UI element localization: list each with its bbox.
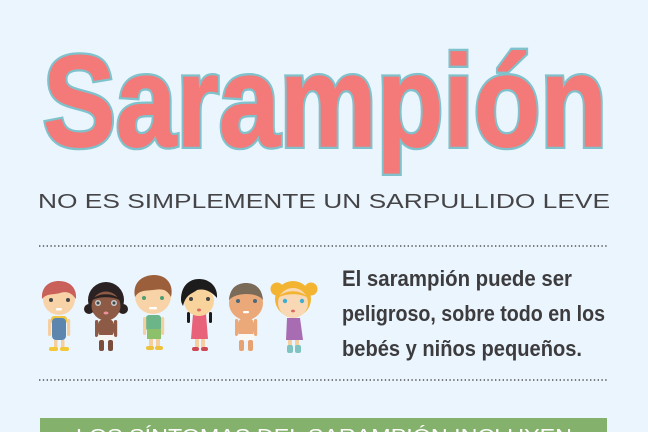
children illustration	[42, 275, 317, 353]
body text: El sarampión puede ser	[342, 266, 572, 291]
child 2: dark skin, black hair, diaper	[84, 282, 128, 351]
child 4: black hair, pink dress	[181, 279, 217, 351]
body text: bebés y niños pequeños.	[342, 336, 582, 361]
child 1: red hair, overalls	[42, 281, 76, 351]
green symptoms banner	[40, 418, 607, 432]
body text	[342, 266, 605, 361]
child 3: brown hair, green clothes	[134, 275, 172, 350]
body text: peligroso, sobre todo en los	[342, 301, 605, 326]
child 6: blonde pigtails, purple dress	[270, 281, 318, 353]
child 5: short hair, diaper	[229, 283, 263, 351]
subtitle: NO ES SIMPLEMENTE UN SARPULLIDO LEVE	[38, 191, 610, 213]
